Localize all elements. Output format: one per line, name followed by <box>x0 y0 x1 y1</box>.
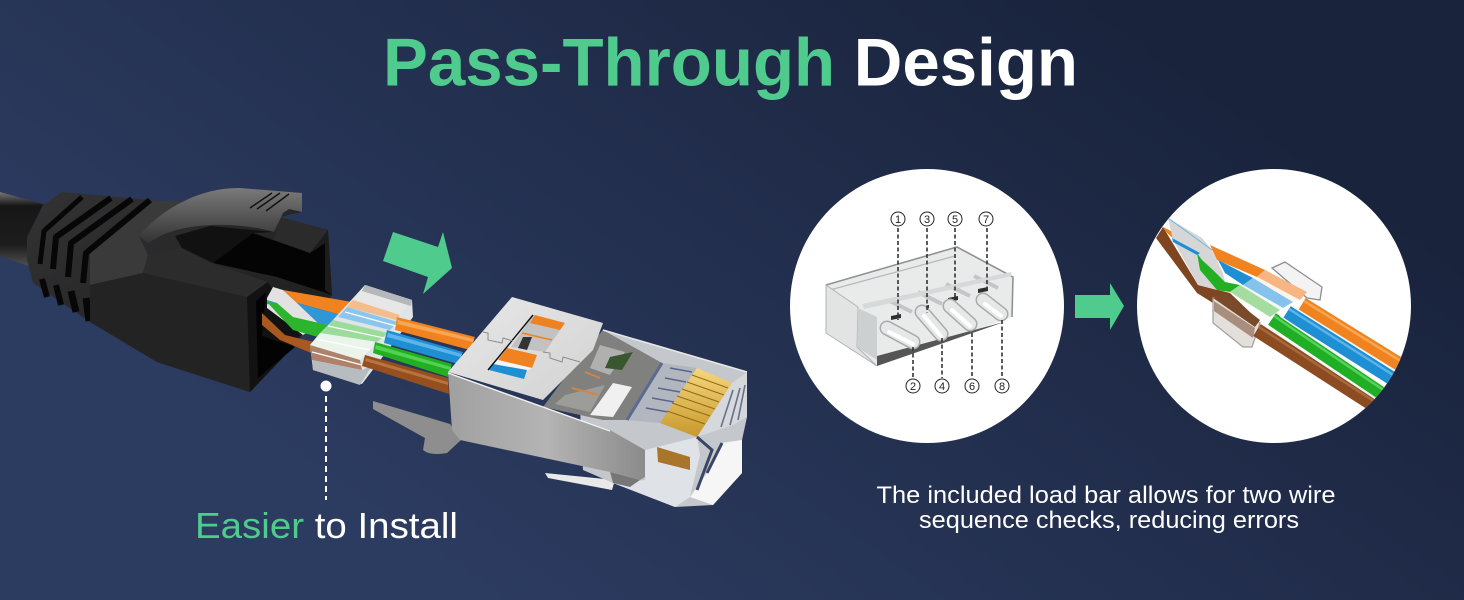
green arrow: insertion direction <box>383 232 452 294</box>
plug window <box>543 330 662 420</box>
metal shield side <box>448 372 645 480</box>
clear section with pin channels <box>627 363 697 423</box>
panel: load bar wire order: 2 <box>910 381 916 393</box>
panel: wires through load bar <box>1137 169 1420 443</box>
boot ledge <box>274 217 328 253</box>
panel: load bar wire order: 8 <box>999 381 1005 393</box>
wires: left bundle <box>262 287 352 355</box>
load bar rungs <box>888 276 998 312</box>
wire channels <box>887 300 1001 344</box>
boot latch underside <box>175 226 274 263</box>
panel: load bar wire order: 5 <box>952 214 958 226</box>
load bar end <box>826 285 877 366</box>
wire separators <box>1264 308 1396 399</box>
load bar <box>826 247 1013 366</box>
lower body <box>613 437 700 507</box>
wires: into plug <box>362 317 475 394</box>
orange wire fan-out <box>1163 227 1172 238</box>
illustration: network cable and boot <box>0 188 332 392</box>
grip lines <box>250 193 289 211</box>
strain relief boot <box>27 188 332 392</box>
panel: load bar wire order: 6 <box>969 381 975 393</box>
brown wire <box>1253 324 1376 408</box>
arrow: between circles <box>1075 283 1124 330</box>
caption: The included load bar allows for two wire <box>876 482 1336 509</box>
label: easier to install: Easier to Install <box>195 505 458 546</box>
panel: load bar wire order: 1 <box>895 214 901 226</box>
load bar base strip <box>877 320 1010 366</box>
load bar front <box>1213 297 1260 347</box>
title: Pass-Through Design <box>383 24 1078 100</box>
wires in load bar <box>1257 270 1307 300</box>
load bar on cable <box>310 285 413 385</box>
panel: load bar wire order <box>790 169 1064 443</box>
cable <box>0 192 50 268</box>
brown wire fan-out <box>1156 227 1252 314</box>
boot front face <box>247 282 300 392</box>
plug nose <box>697 372 747 437</box>
boot side face <box>90 273 250 392</box>
metal shield top <box>448 297 603 400</box>
boot top surface <box>143 248 268 297</box>
load bar rear <box>1272 262 1322 300</box>
position numbers <box>898 228 1002 378</box>
panel: load bar wire order: 4 <box>939 381 945 393</box>
shield seam <box>483 332 580 362</box>
shield window front <box>498 348 537 368</box>
rear tab <box>373 401 461 454</box>
bottom latch <box>545 473 615 490</box>
twisted jacket <box>1168 218 1225 290</box>
gold contacts <box>660 368 732 437</box>
load bar slots <box>891 287 988 320</box>
green wire <box>1268 313 1385 398</box>
wire highlights <box>1258 300 1400 402</box>
panel: load bar wire order: 3 <box>924 214 930 226</box>
caption <box>876 482 1336 534</box>
shield window rear <box>511 315 565 352</box>
blue wire <box>1284 306 1394 384</box>
boot shoulder highlight <box>90 200 187 285</box>
boot inner opening <box>213 233 332 295</box>
orange wire <box>1298 298 1401 370</box>
caption: sequence checks, reducing errors <box>919 507 1299 534</box>
RJ45 pass-through plug <box>373 297 747 507</box>
boot ribs <box>40 197 150 321</box>
callout: load bar pointer <box>320 380 332 500</box>
boot latch cover <box>139 188 302 243</box>
bottom latch clip <box>690 440 742 505</box>
transparent plug body <box>545 330 747 507</box>
panel: load bar wire order: 7 <box>983 214 989 226</box>
top edge of body <box>603 330 747 372</box>
